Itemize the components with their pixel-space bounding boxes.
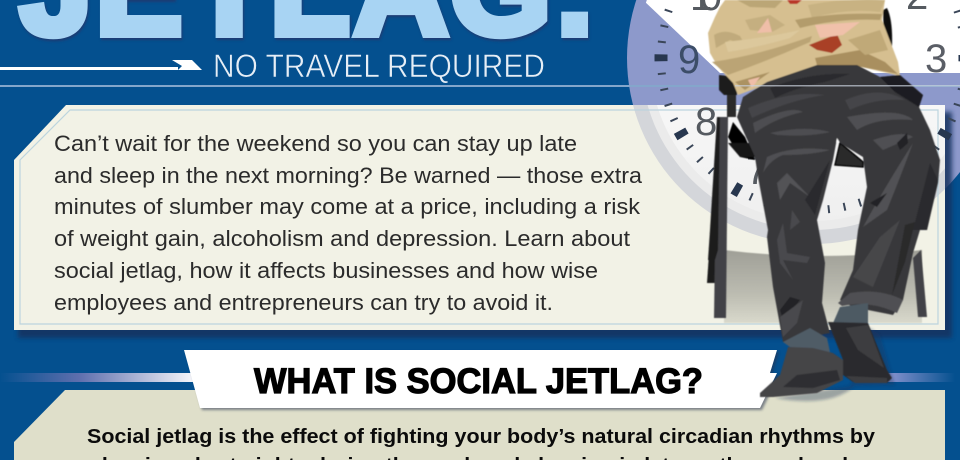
- clock numbers: 9: [678, 38, 700, 82]
- socks: [830, 303, 868, 330]
- front shoe: [760, 347, 843, 397]
- heading text: WHAT IS SOCIAL JETLAG?: [254, 362, 703, 401]
- shoe shadow: [775, 328, 895, 401]
- back shoe: [828, 322, 892, 383]
- clock disc back shade: [627, 0, 960, 244]
- heading banner: [184, 350, 779, 410]
- intro paragraph: [54, 131, 642, 315]
- clock numbers: [678, 0, 947, 193]
- sweater: [708, 0, 900, 95]
- figure: sleeping man on chair: [707, 0, 940, 401]
- chair: [707, 8, 927, 318]
- subtitle rule and flag: [0, 60, 202, 70]
- clock ticks: [661, 0, 960, 210]
- intro paragraph: social jetlag, how it affects businesses and how wise: [54, 258, 598, 283]
- intro paragraph: of weight gain, alcoholism and depression. Learn about: [54, 226, 631, 251]
- title: JETLAG: [20, 0, 597, 64]
- clock: [646, 0, 960, 214]
- floor shadow: [724, 250, 922, 323]
- panel: intro: [14, 105, 956, 340]
- hands: [757, 18, 772, 33]
- definition text: [87, 425, 876, 460]
- tie: [809, 34, 842, 53]
- heading bars: [0, 373, 955, 382]
- definition text: Social jetlag is the effect of fighting your body’s natural circadian rhythms by: [87, 425, 876, 448]
- clock face top: [646, 0, 960, 73]
- clock face in panel: [633, 105, 945, 244]
- intro paragraph: Can’t wait for the weekend so you can stay up late: [54, 131, 577, 156]
- panel: definition: [14, 390, 945, 460]
- intro paragraph: minutes of slumber may come at a price, including a risk: [54, 194, 641, 219]
- trousers: [737, 65, 940, 342]
- intro paragraph: employees and entrepreneurs can try to avoid it.: [54, 290, 553, 315]
- clock numbers: 7: [746, 149, 768, 193]
- subtitle: NO TRAVEL REQUIRED: [213, 48, 545, 84]
- clock numbers: 3: [925, 37, 947, 81]
- divider overlay on figure: [735, 85, 960, 86]
- intro paragraph: and sleep in the next morning? Be warned — those extra: [54, 163, 642, 188]
- divider: [0, 85, 960, 87]
- clock numbers: 8: [695, 100, 717, 144]
